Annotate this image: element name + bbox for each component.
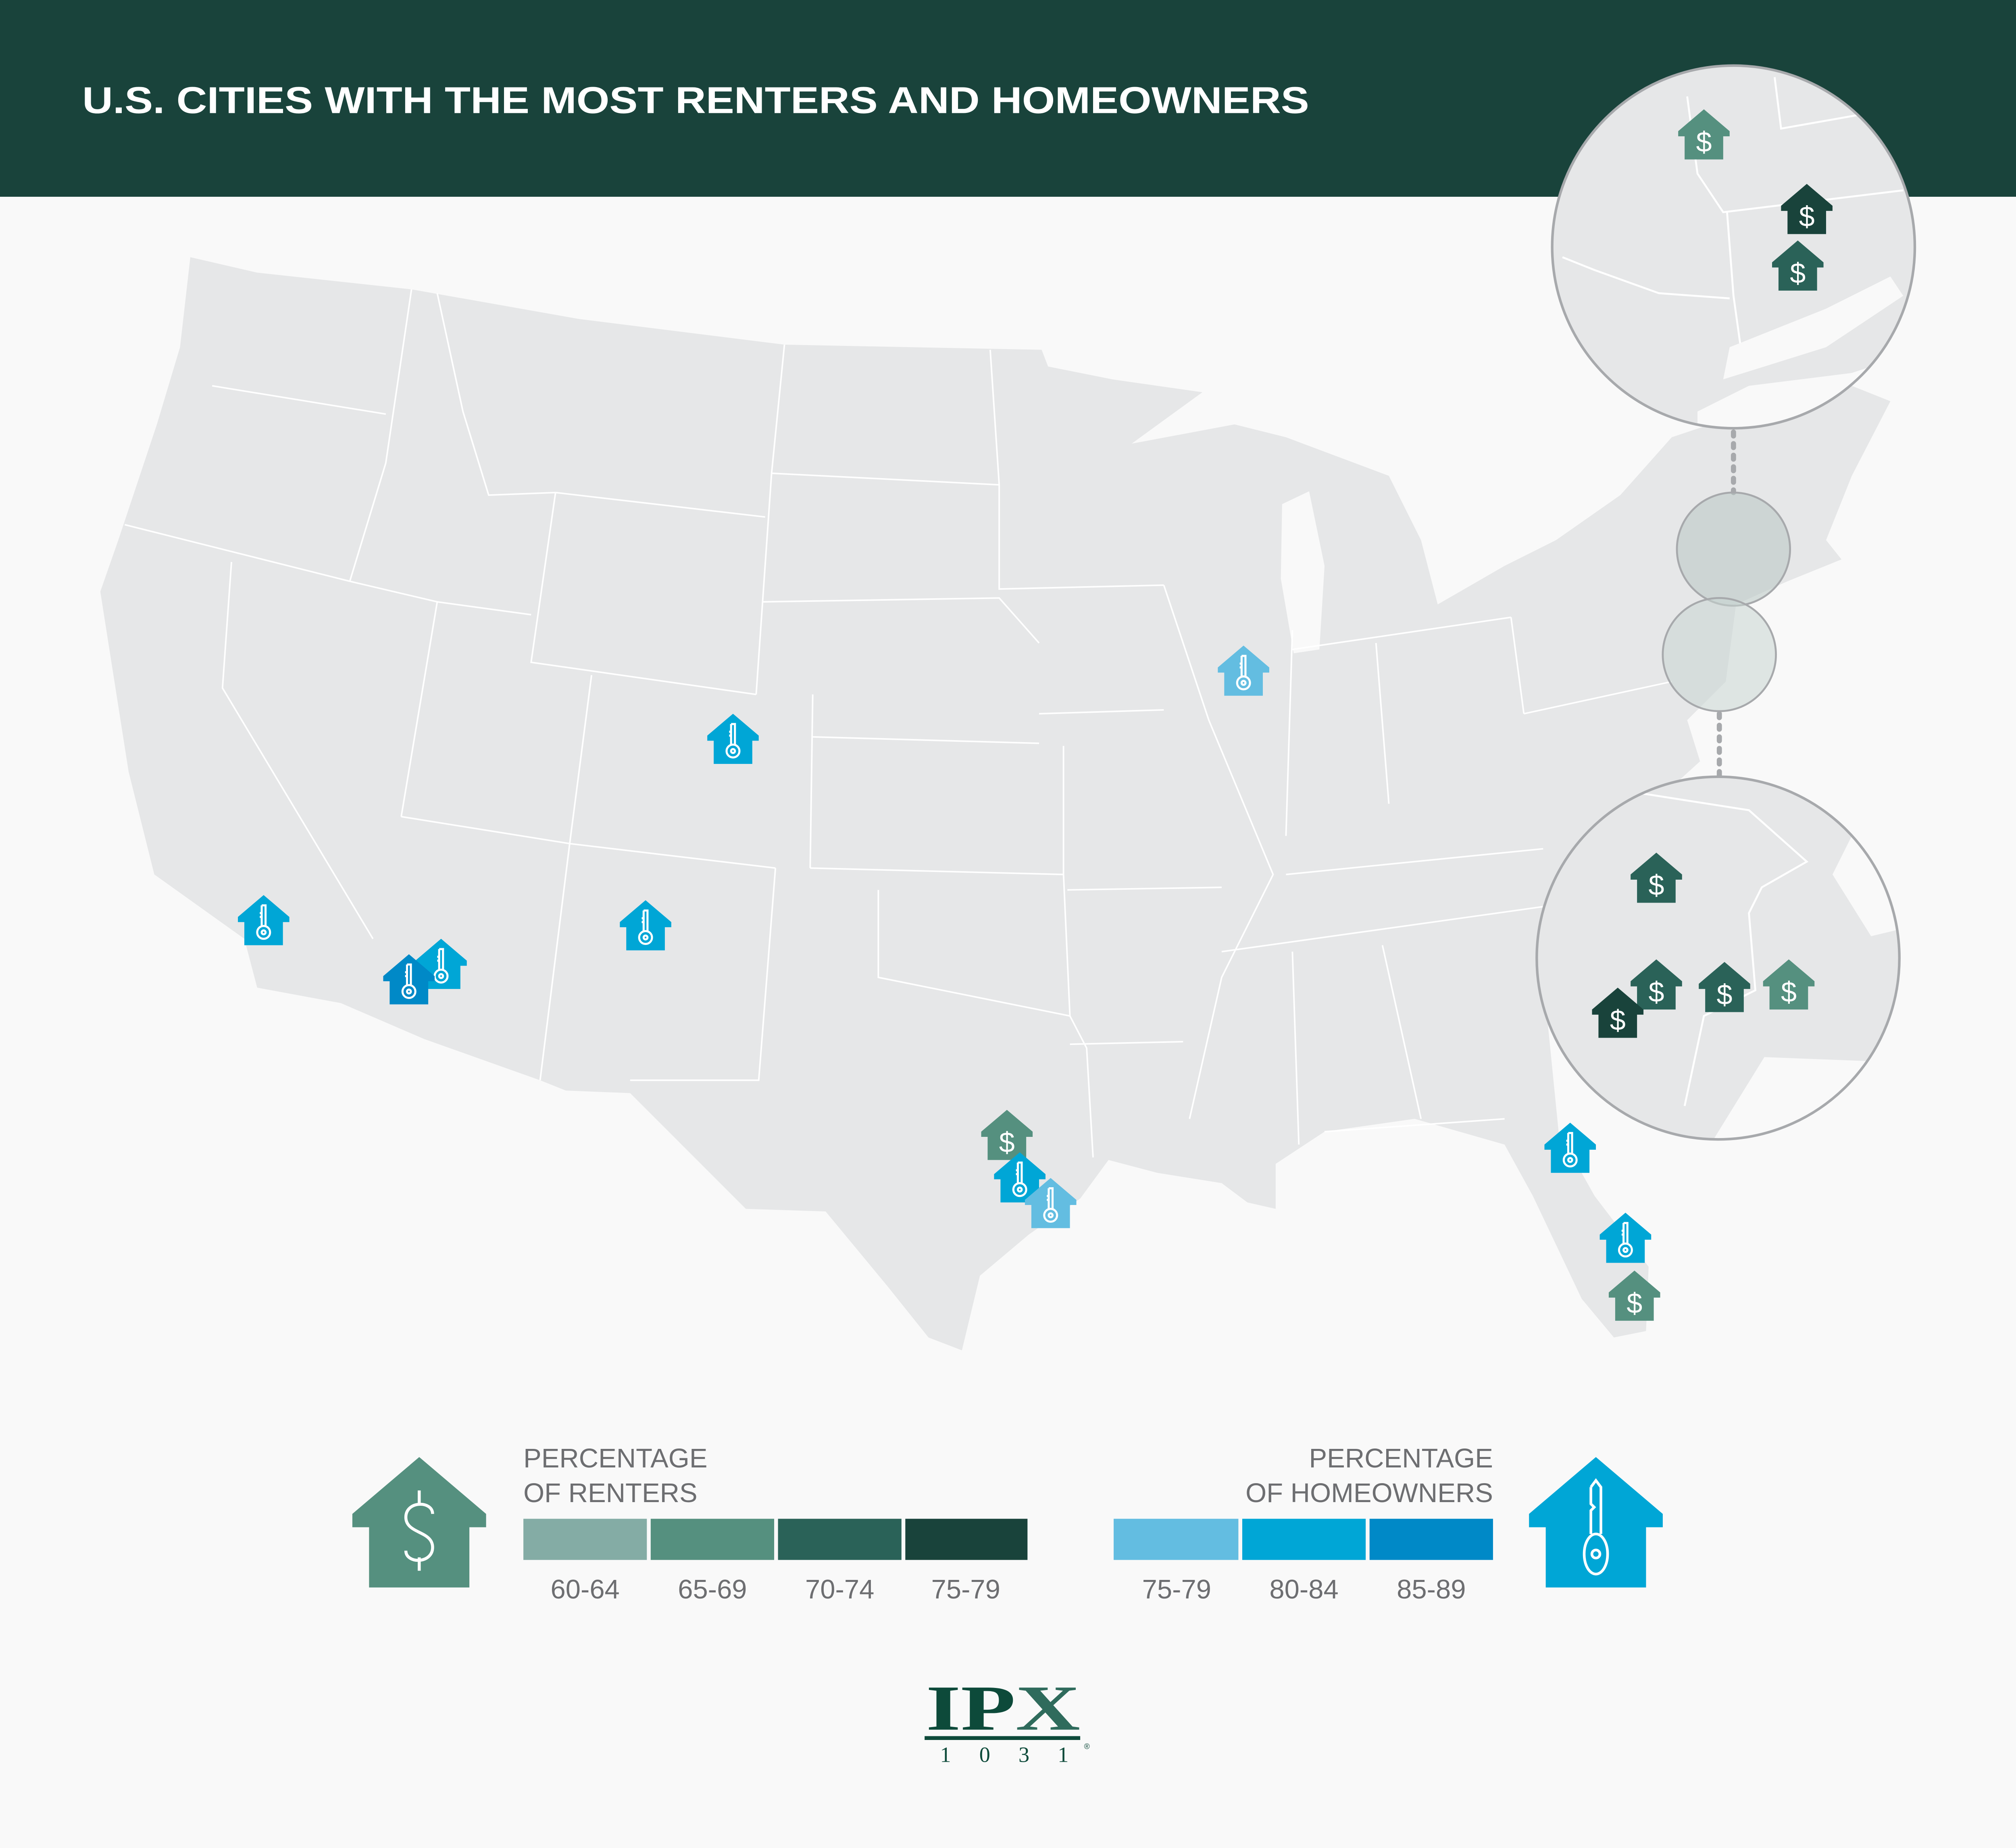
map: contiguous US <box>100 257 1890 1350</box>
marker: Arizona owner 80-84 <box>415 939 467 989</box>
homeowner color scale <box>1114 1519 1493 1560</box>
logo: IPX 1031 <box>925 1673 1097 1767</box>
marker: renter 70-74 (right) <box>1699 962 1750 1012</box>
title: U.S. CITIES WITH THE MOST RENTERS AND HOMEOWNERS <box>82 79 1309 121</box>
marker: renter 65-69 <box>1678 109 1730 160</box>
marker: renter 70-74 (top) <box>1631 853 1682 903</box>
renter scale labels: 65-69 <box>678 1574 747 1605</box>
zoom circle: New Jersey region <box>1537 777 1903 1145</box>
legend title: renters: PERCENTAGE <box>523 1443 708 1473</box>
marker: Illinois owner 75-79 <box>1218 645 1269 696</box>
marker: Colorado owner 80-84 <box>707 714 759 764</box>
marker: New Mexico owner 80-84 <box>620 900 671 950</box>
homeowner scale labels: 80-84 <box>1269 1574 1339 1605</box>
marker: renter 75-79 <box>1781 184 1833 234</box>
legend title: homeowners: PERCENTAGE <box>1309 1443 1493 1473</box>
renter scale labels: 60-64 <box>551 1574 620 1605</box>
marker: renter 75-79 <box>1592 988 1643 1038</box>
marker: Florida owner 80-84 (north) <box>1544 1123 1596 1173</box>
header bar <box>0 0 2016 197</box>
zoom circle: Connecticut region <box>1552 66 1929 437</box>
marker: renter 65-69 <box>1763 959 1814 1009</box>
legend title: homeowners: OF HOMEOWNERS <box>1245 1478 1493 1508</box>
small highlight circle: New England <box>1677 493 1790 606</box>
renter scale labels <box>551 1574 1000 1605</box>
marker: Texas owner 75-79 <box>1025 1178 1077 1228</box>
logo: IPX 1031: 1031 <box>940 1742 1097 1767</box>
logo: IPX 1031: IP X <box>926 1673 1080 1744</box>
homeowner scale labels: 85-89 <box>1397 1574 1466 1605</box>
dotted connector top <box>1733 432 1734 493</box>
renter scale labels: 75-79 <box>931 1574 1000 1605</box>
marker: renter 70-74 <box>1772 241 1824 291</box>
legend: renters <box>352 1443 1027 1605</box>
marker: Arizona owner 85-89 <box>383 954 435 1004</box>
renter scale labels: 70-74 <box>805 1574 874 1605</box>
icon: homeowner house with key <box>1529 1457 1663 1588</box>
marker: renter 70-74 (middle) <box>1631 959 1682 1009</box>
dotted connector bottom <box>1718 714 1720 776</box>
logo: IPX 1031: ® <box>1084 1742 1090 1751</box>
marker: Florida owner 80-84 (south) <box>1600 1213 1651 1263</box>
small highlight circle: New Jersey <box>1663 598 1776 711</box>
homeowner scale labels: 75-79 <box>1142 1574 1211 1605</box>
marker: Texas renter 65-69 <box>981 1110 1033 1160</box>
legend: homeowners <box>1114 1443 1663 1605</box>
marker: Texas owner 80-84 <box>994 1152 1045 1203</box>
marker: Los Angeles area owner 80-84 <box>238 895 289 945</box>
renter color scale <box>523 1519 1027 1560</box>
icon: renter house <box>352 1457 486 1588</box>
legend title: renters: OF RENTERS <box>523 1478 698 1508</box>
homeowner scale labels <box>1142 1574 1466 1605</box>
marker: Florida renter 65-69 <box>1609 1271 1660 1321</box>
